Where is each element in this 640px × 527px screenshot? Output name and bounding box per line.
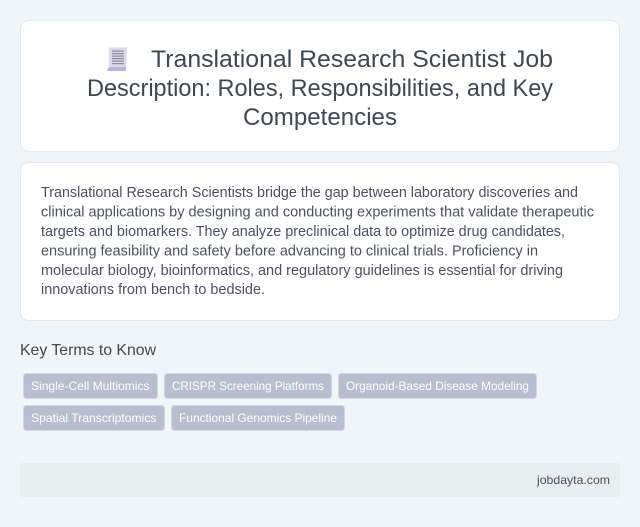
- footer source: jobdayta.com: [536, 473, 610, 487]
- chip: Functional Genomics Pipeline: [172, 406, 344, 430]
- panel: title card: [20, 20, 620, 152]
- chip: Spatial Transcriptomics: [24, 406, 164, 430]
- icon: document scroll: [107, 48, 127, 71]
- chip: CRISPR Screening Platforms: CRISPR Screening Platforms: [172, 379, 324, 393]
- text block: description: clinical applications by designing and conducting experiments that validate therapeutic: [41, 204, 594, 220]
- panel: description card: [20, 162, 620, 320]
- text block: description: ensuring feasibility and safety before advancing to clinical trials. Proficiency in: [41, 244, 538, 260]
- title: Translational Research Scientist Job: [151, 46, 553, 73]
- chip: Single-Cell Multiomics: [24, 374, 158, 398]
- heading: key terms: Key Terms to Know: [20, 342, 156, 359]
- chip: Organoid-Based Disease Modeling: Organoid-Based Disease Modeling: [346, 379, 529, 393]
- title: Description: Roles, Responsibilities, and Key: [87, 75, 553, 102]
- text block: description: targets and biomarkers. They analyze preclinical data to optimize drug candidates,: [41, 224, 565, 240]
- text block: description: molecular biology, bioinformatics, and regulatory guidelines is essential for driving: [41, 263, 563, 279]
- chip: Organoid-Based Disease Modeling: [338, 374, 536, 398]
- text block: description: Translational Research Scientists bridge the gap between laboratory discoveries and: [41, 185, 578, 201]
- chip: Single-Cell Multiomics: Single-Cell Multiomics: [31, 379, 150, 393]
- title: Competencies: [243, 104, 397, 131]
- chip: Spatial Transcriptomics: Spatial Transcriptomics: [31, 411, 156, 425]
- chip: Functional Genomics Pipeline: Functional Genomics Pipeline: [179, 411, 337, 425]
- text block: description: innovations from bench to bedside.: [41, 282, 265, 298]
- title: [87, 46, 553, 131]
- footer: [20, 463, 620, 497]
- text block: description: [41, 185, 594, 298]
- chips: key terms: [24, 374, 536, 430]
- chip: CRISPR Screening Platforms: [164, 374, 332, 398]
